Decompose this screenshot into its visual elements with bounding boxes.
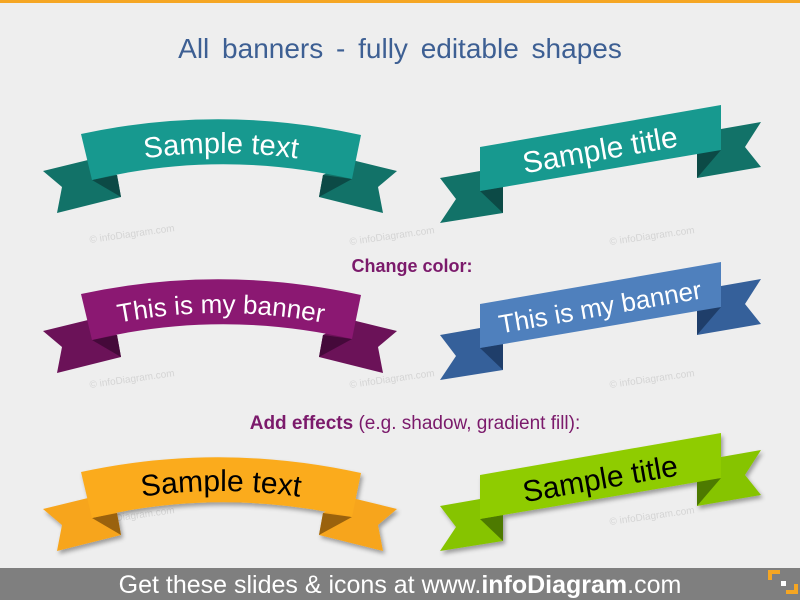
watermarks: [89, 223, 695, 528]
banner: teal arch: [43, 119, 397, 213]
banner: purple arch: [43, 279, 397, 373]
watermarks: © infoDiagram.com: [609, 225, 695, 248]
label: change color: Change color:: [351, 256, 473, 276]
watermarks: © infoDiagram.com: [609, 505, 695, 528]
banner: orange arch: [43, 457, 400, 556]
banner: blue slanted: This is my banner: [496, 275, 704, 339]
footer bar: Get these slides & icons at www.infoDiagram.com: [119, 571, 681, 599]
banner: teal slanted: [440, 105, 761, 223]
title: All banners - fully editable shapes: [178, 33, 622, 64]
watermarks: © infoDiagram.com: [89, 505, 175, 528]
banner: teal arch: Sample text: [144, 132, 299, 160]
banner: purple arch: This is my banner: [116, 294, 326, 322]
banner: green slanted: [440, 433, 761, 551]
watermarks: © infoDiagram.com: [349, 225, 435, 248]
icon: logo: [768, 570, 798, 594]
watermarks: © infoDiagram.com: [349, 368, 435, 391]
banner: teal slanted: Sample title: [520, 121, 680, 180]
watermarks: © infoDiagram.com: [89, 368, 175, 391]
watermarks: © infoDiagram.com: [89, 223, 175, 246]
banner: orange arch: Sample text: [142, 469, 302, 498]
banner: blue slanted: [440, 262, 761, 380]
watermarks: © infoDiagram.com: [609, 368, 695, 391]
banner: green slanted: Sample title: [520, 450, 680, 509]
footer bar: [0, 568, 800, 600]
label: add effects: Add effects (e.g. shadow, gradient fill):: [250, 413, 580, 434]
